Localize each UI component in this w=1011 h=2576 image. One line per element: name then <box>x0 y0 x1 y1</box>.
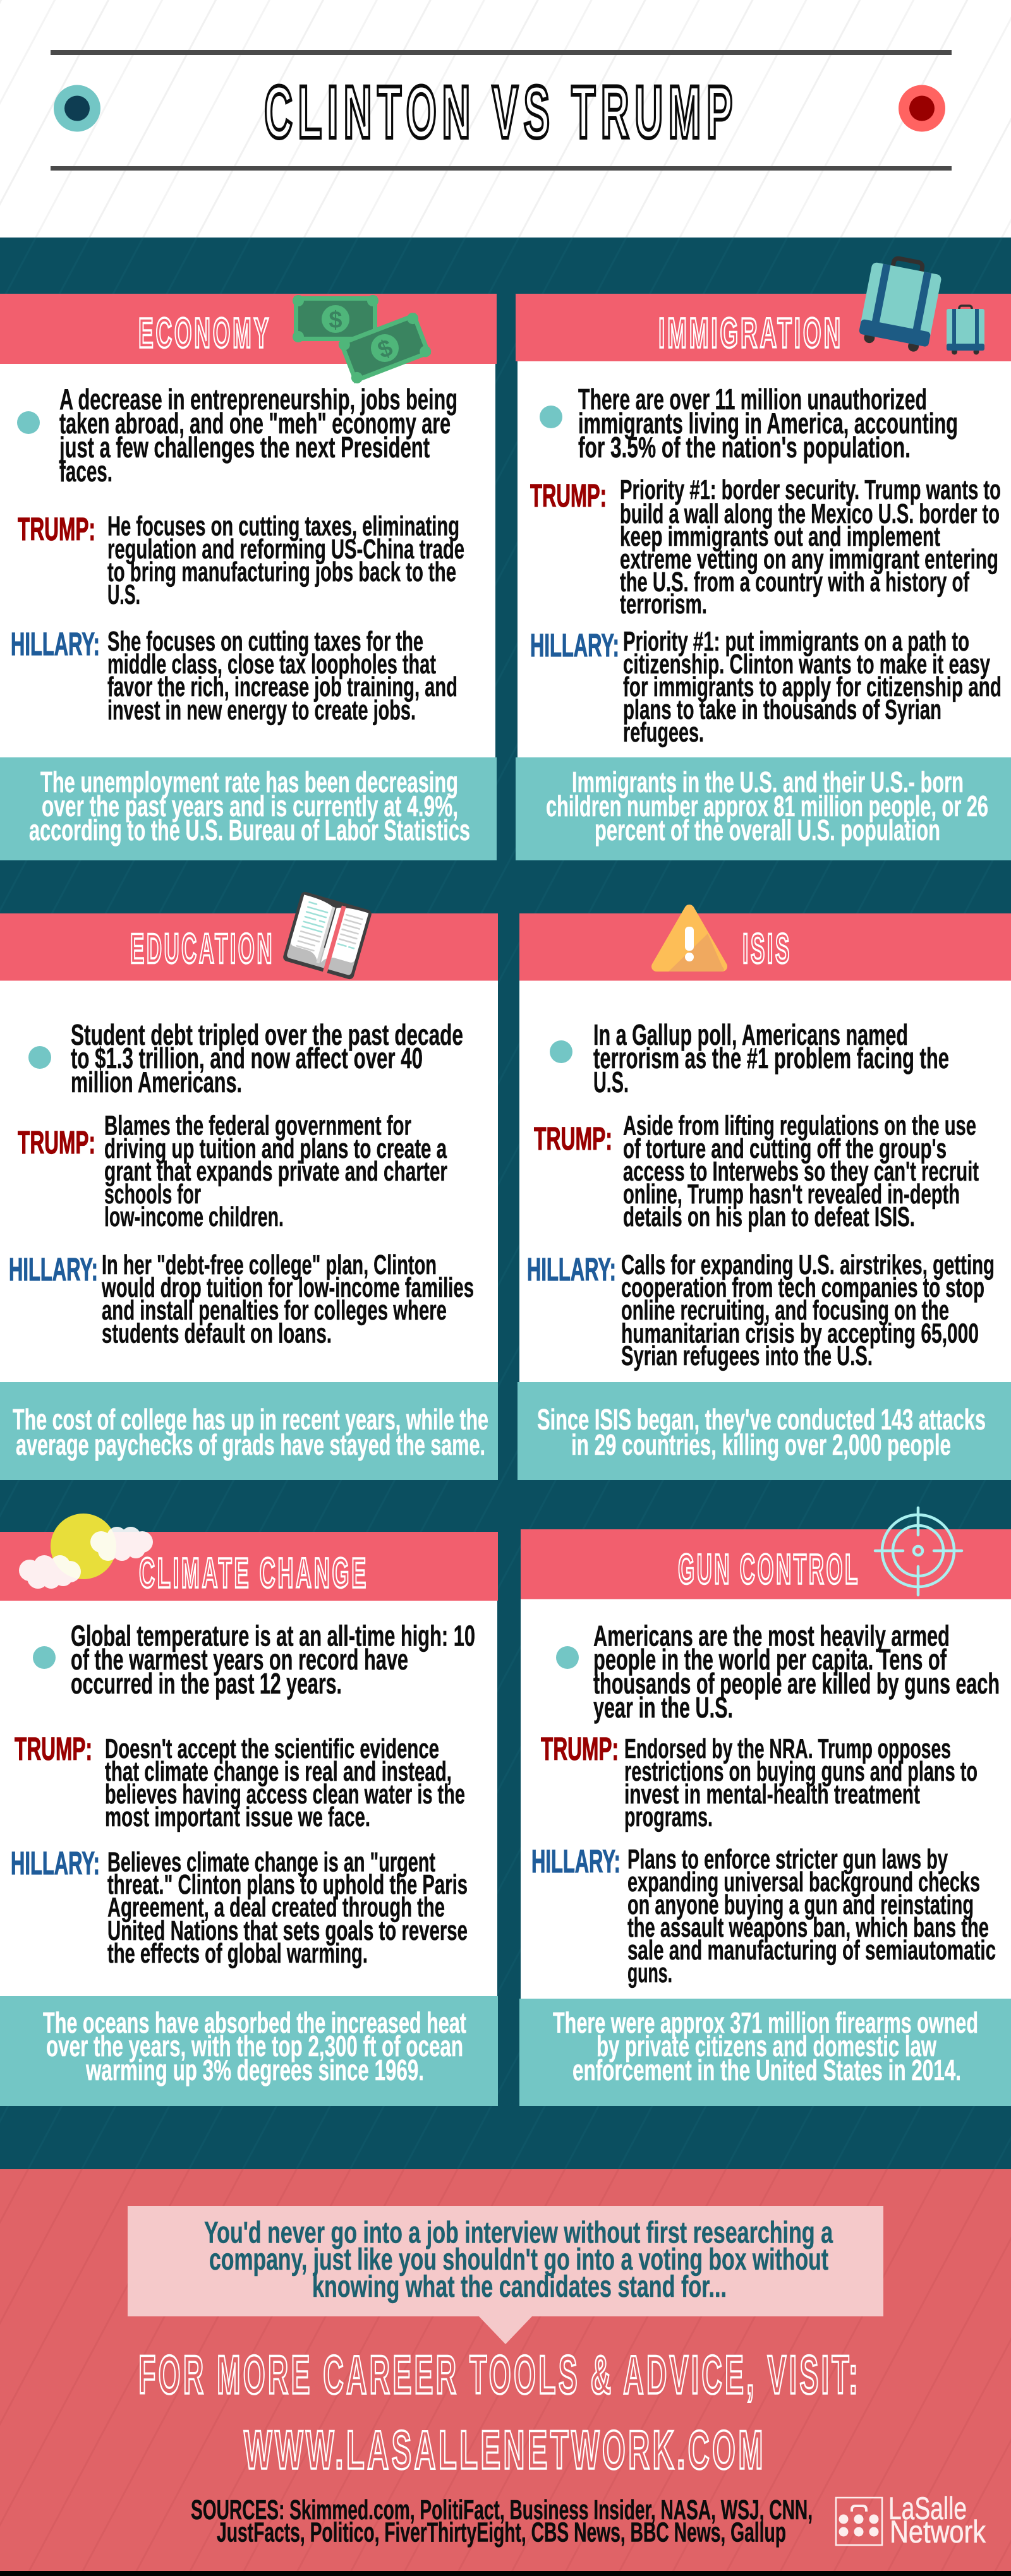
Trump text: programs. <box>624 1802 713 1833</box>
panel: education: EDUCATION <box>130 925 274 973</box>
Hillary text <box>107 626 457 726</box>
Hillary text: guns. <box>627 1958 672 1989</box>
callout: oceans <box>0 1996 498 2106</box>
Trump text <box>107 510 464 610</box>
Hillary label: HILLARY: <box>11 626 100 662</box>
heading: climate change: CLIMATE CHANGE <box>139 1550 368 1597</box>
intro text: A decrease in entrepreneurship, jobs being <box>59 383 457 416</box>
callout: college cost: average paychecks of grads have stayed the same. <box>16 1428 485 1461</box>
icon: target <box>875 1508 962 1595</box>
intro text: taken abroad, and one "meh" economy are <box>59 407 451 440</box>
Hillary label: HILLARY: <box>527 1251 616 1287</box>
Hillary text <box>621 1249 995 1371</box>
footer panel <box>0 2169 1011 2571</box>
Hillary text: Syrian refugees into the U.S. <box>621 1340 873 1371</box>
Trump text: regulation and reforming US-China trade <box>107 534 464 565</box>
Trump text <box>105 1733 465 1833</box>
intro text: Student debt tripled over the past decade <box>71 1018 463 1051</box>
callout: college cost <box>0 1382 498 1480</box>
Hillary text: She focuses on cutting taxes for the <box>107 626 423 657</box>
icon: bullet <box>17 411 40 434</box>
callout: oceans: over the years, with the top 2,300 ft of ocean <box>46 2030 463 2062</box>
icon: money <box>293 295 433 385</box>
callout: immigrants <box>516 757 1011 860</box>
logo: LaSalle Network: LaSalle <box>888 2491 967 2526</box>
Trump text: He focuses on cutting taxes, eliminating <box>107 510 459 542</box>
Hillary text: middle class, close tax loopholes that <box>107 649 436 680</box>
icon: book <box>282 891 372 982</box>
Trump text: to bring manufacturing jobs back to the <box>107 557 456 587</box>
Trump label: TRUMP: <box>18 1124 95 1160</box>
Hillary text: the effects of global warming. <box>107 1938 368 1969</box>
panel: ISIS <box>518 910 1011 1480</box>
icon: suitcases <box>857 254 984 355</box>
callout: firearms <box>519 1999 1011 2106</box>
intro text <box>578 383 958 464</box>
intro text <box>59 383 457 488</box>
intro text <box>593 1018 949 1098</box>
callout: unemployment: The unemployment rate has been decreasing <box>40 766 458 798</box>
Trump text: Blames the federal government for <box>104 1110 411 1141</box>
Trump label: TRUMP: <box>15 1731 92 1767</box>
intro text <box>71 1620 475 1700</box>
intro text <box>593 1620 1000 1724</box>
Trump text <box>104 1110 447 1232</box>
Hillary label: HILLARY: <box>530 627 619 663</box>
callout: unemployment: over the past years and is currently at 4.9%, <box>42 790 458 822</box>
intro text: of the warmest years on record have <box>71 1643 408 1676</box>
intro text: just a few challenges the next President <box>59 431 430 464</box>
icon: bullet <box>540 406 562 428</box>
dark background band <box>0 238 1011 2169</box>
icon: bullet <box>556 1646 579 1669</box>
icon: money: $ <box>329 307 342 334</box>
icon: Trump dot <box>899 85 945 131</box>
Hillary text: invest in new energy to create jobs. <box>107 695 416 726</box>
logo: LaSalle Network <box>836 2491 986 2549</box>
Hillary text <box>101 1249 474 1349</box>
Trump text: low-income children. <box>104 1201 284 1232</box>
icon: money: $ <box>374 334 396 364</box>
bottom black bar <box>0 2571 1011 2576</box>
Trump text: believes having access clean water is the <box>105 1779 465 1810</box>
callout: unemployment: according to the U.S. Bureau of Labor Statistics <box>29 814 470 846</box>
callout: oceans: warming up 3% degrees since 1969. <box>85 2054 424 2086</box>
callout: college cost: The cost of college has up in recent years, while the <box>13 1403 488 1436</box>
Trump text: that climate change is real and instead, <box>105 1756 452 1787</box>
callout: oceans: The oceans have absorbed the increased heat <box>43 2006 466 2039</box>
Hillary text <box>627 1844 996 1989</box>
callout: ISIS attacks <box>518 1382 1011 1480</box>
Trump text: most important issue we face. <box>105 1802 370 1833</box>
Trump text: driving up tuition and plans to create a <box>104 1133 447 1164</box>
Hillary text: favor the rich, increase job training, and <box>107 671 457 702</box>
Hillary text: refugees. <box>623 717 704 748</box>
icon: sun and clouds <box>19 1514 153 1589</box>
panel: gun control <box>519 1508 1011 2106</box>
intro text: Global temperature is at an all-time high: 10 <box>71 1620 475 1652</box>
Trump text: schools for <box>104 1179 201 1210</box>
Hillary text <box>623 626 1002 748</box>
intro text: occurred in the past 12 years. <box>71 1667 342 1700</box>
icon: bullet <box>550 1040 572 1063</box>
heading: ISIS: ISIS <box>742 925 792 973</box>
Hillary text: In her "debt-free college" plan, Clinton <box>102 1249 437 1280</box>
panel: economy <box>0 294 497 860</box>
panel: education <box>0 891 498 1480</box>
icon: bullet <box>33 1646 56 1669</box>
Hillary text: and install penalties for colleges where <box>102 1295 447 1326</box>
Hillary label: HILLARY: <box>9 1251 98 1287</box>
intro text <box>71 1018 463 1098</box>
Trump text: grant that expands private and charter <box>104 1156 447 1187</box>
panel: climate change <box>0 1514 498 2106</box>
Hillary text: students default on loans. <box>102 1318 332 1349</box>
Hillary text: Agreement, a deal created through the <box>107 1892 445 1923</box>
Trump text <box>624 1733 978 1833</box>
intro text: to $1.3 trillion, and now affect over 40 <box>71 1042 423 1074</box>
Hillary text: would drop tuition for low-income families <box>101 1272 474 1303</box>
icon: Clinton dot <box>54 85 100 131</box>
Trump text <box>620 474 1001 620</box>
Hillary text: threat." Clinton plans to uphold the Paris <box>107 1869 468 1900</box>
Trump label: TRUMP: <box>530 478 607 514</box>
icon: warning <box>657 910 724 972</box>
sources <box>191 2495 813 2548</box>
intro text: U.S. <box>593 1066 629 1098</box>
Trump text: Doesn't accept the scientific evidence <box>105 1733 439 1764</box>
speech bubble callout: knowing what the candidates stand for... <box>312 2270 727 2304</box>
Trump text <box>623 1110 979 1232</box>
heading: immigration: IMMIGRATION <box>658 310 843 357</box>
title section <box>0 0 1011 238</box>
Hillary text: United Nations that sets goals to reverse <box>107 1915 468 1946</box>
speech bubble callout <box>128 2206 883 2344</box>
logo: LaSalle Network: Network <box>890 2514 986 2549</box>
Trump label: TRUMP: <box>18 511 95 547</box>
heading: economy: ECONOMY <box>138 310 271 357</box>
Hillary text: Believes climate change is an "urgent <box>107 1847 435 1877</box>
intro text: faces. <box>59 455 112 488</box>
intro text: year in the U.S. <box>593 1691 733 1724</box>
intro text: million Americans. <box>71 1066 242 1098</box>
Trump text: terrorism. <box>620 589 707 620</box>
Hillary text <box>107 1847 468 1969</box>
icon: bullet <box>28 1046 51 1069</box>
Trump label: TRUMP: <box>541 1731 619 1767</box>
Trump label: TRUMP: <box>534 1121 612 1157</box>
Hillary label: HILLARY: <box>531 1843 621 1879</box>
panel: immigration <box>516 254 1011 860</box>
Trump text: U.S. <box>107 579 140 610</box>
callout: unemployment <box>0 757 497 860</box>
Hillary label: HILLARY: <box>11 1845 100 1881</box>
